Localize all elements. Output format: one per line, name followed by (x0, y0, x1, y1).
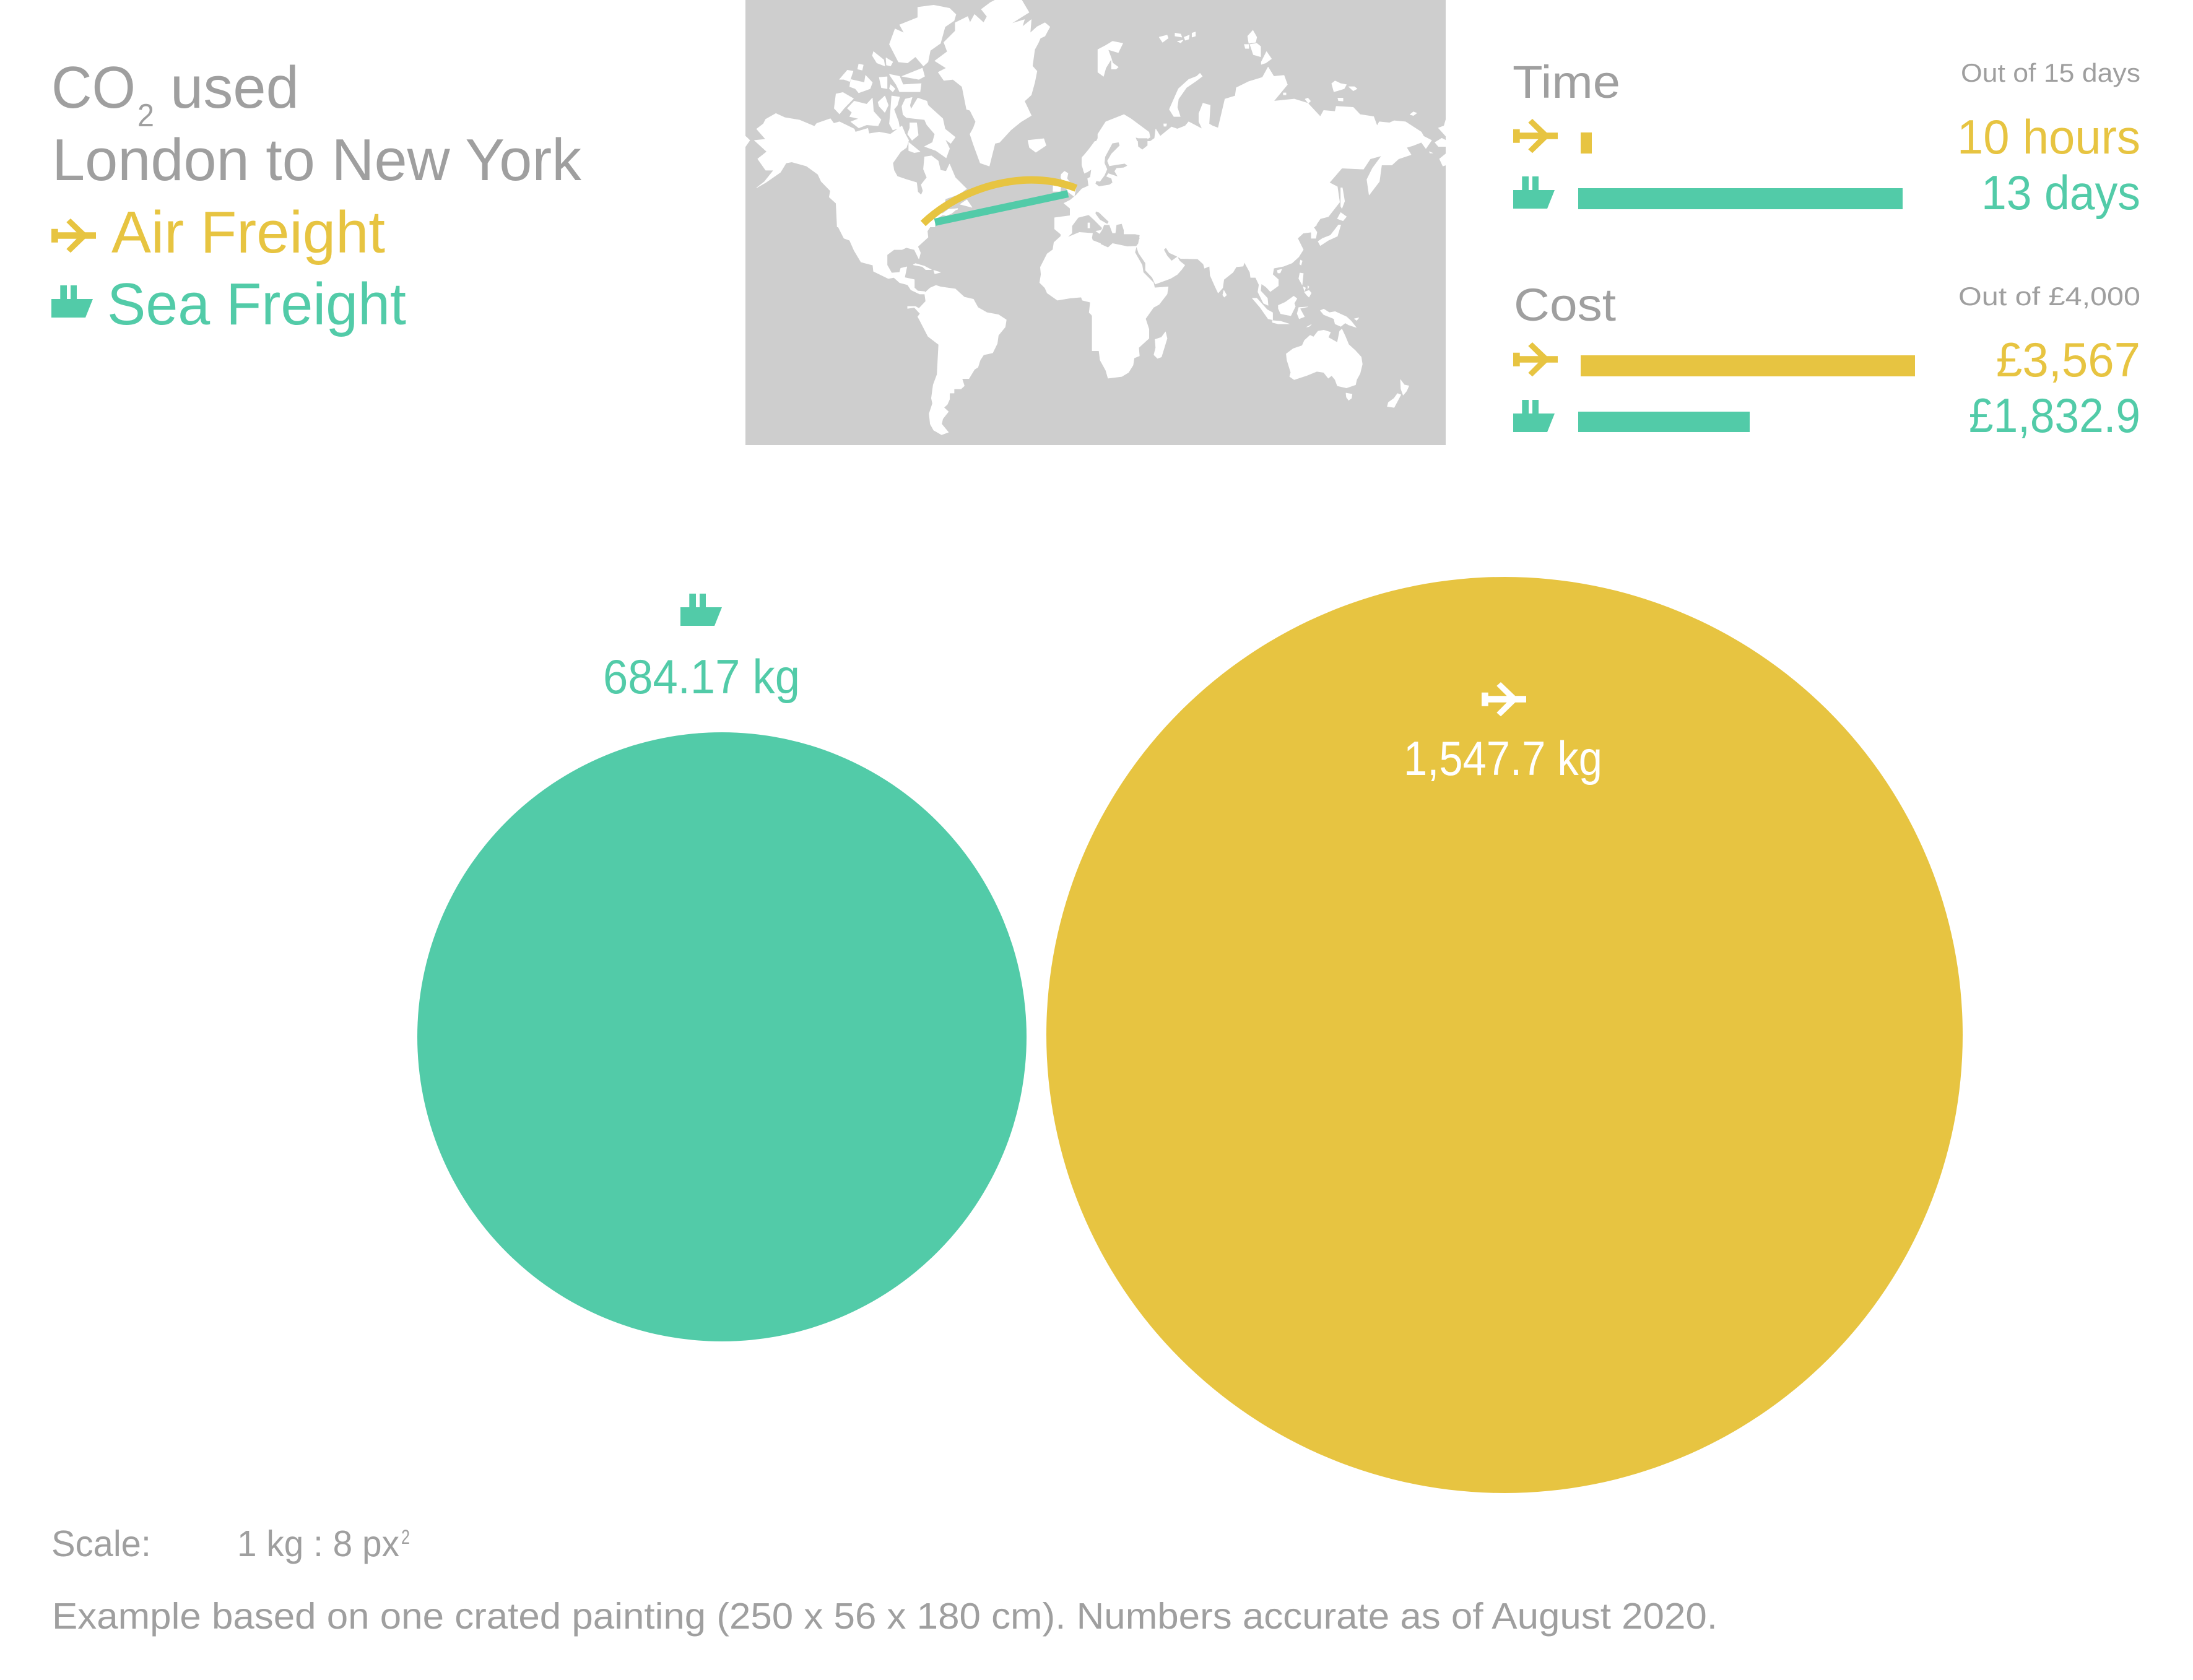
sea freight CO2 label (603, 594, 800, 704)
icon: plane white (1482, 682, 1526, 716)
footnote: Example based on one crated painting (250 x 56 x 180 cm). Numbers accurate as of August 2020. (52, 1596, 1717, 1637)
title: CO2 used, London to New York: 2 (137, 98, 154, 134)
bar: air time (1581, 132, 1592, 154)
value: air CO2: 1,547.7 kg (1404, 731, 1602, 786)
scale note: Scale: (51, 1523, 151, 1564)
scale note (51, 1523, 410, 1564)
title: CO2 used, London to New York: London to New York (52, 127, 582, 193)
sea route line (935, 194, 1068, 222)
note: out of 4,000 pounds: Out of £4,000 (1958, 282, 2140, 311)
Gulf of St Lawrence (942, 196, 960, 214)
legend: sea freight: Sea Freight (107, 271, 406, 337)
heading: time: Time (1513, 56, 1620, 108)
scale note: 1 kg : 8 px (237, 1523, 399, 1564)
icon: ship (51, 285, 93, 318)
value: 3,567 pounds: £3,567 (1996, 332, 2140, 387)
bar: sea cost (1578, 412, 1750, 432)
icon: ship (1513, 400, 1555, 432)
icon: plane (1513, 342, 1558, 376)
panel: time comparison (1513, 56, 2140, 220)
bubble: sea freight CO2 (417, 732, 1027, 1341)
icon: plane (1513, 119, 1558, 153)
value: 1,832.9 pounds: £1,832.9 (1969, 388, 2140, 443)
seas of Europe (1061, 138, 1147, 248)
icon: plane (51, 219, 96, 253)
note: out of 15 days: Out of 15 days (1961, 58, 2140, 87)
value: 13 days: 13 days (1981, 165, 2140, 220)
bar: air cost (1581, 355, 1915, 376)
air route arc (923, 180, 1076, 223)
title: CO2 used, London to New York: CO (51, 54, 136, 121)
legend: air freight: Air Freight (111, 199, 385, 266)
icon: ship (680, 594, 722, 626)
value: 10 hours: 10 hours (1957, 110, 2140, 164)
panel: world map with routes (745, 0, 1446, 445)
heading: cost: Cost (1514, 279, 1616, 331)
bubble: air freight CO2 (1046, 577, 1963, 1493)
title: CO2 used, London to New York: used (170, 54, 299, 121)
icon: ship (1513, 176, 1555, 209)
panel: cost comparison (1513, 279, 2140, 443)
land masses (745, 0, 1446, 435)
scale note: 2 (401, 1526, 410, 1548)
bar: sea time (1578, 188, 1903, 209)
title: CO2 used, London to New York (51, 54, 582, 193)
sea freight CO2 label: 684.17 kg (603, 649, 800, 704)
Europe mainland (1054, 141, 1150, 238)
Africa, Oceania and islands (941, 171, 1409, 407)
